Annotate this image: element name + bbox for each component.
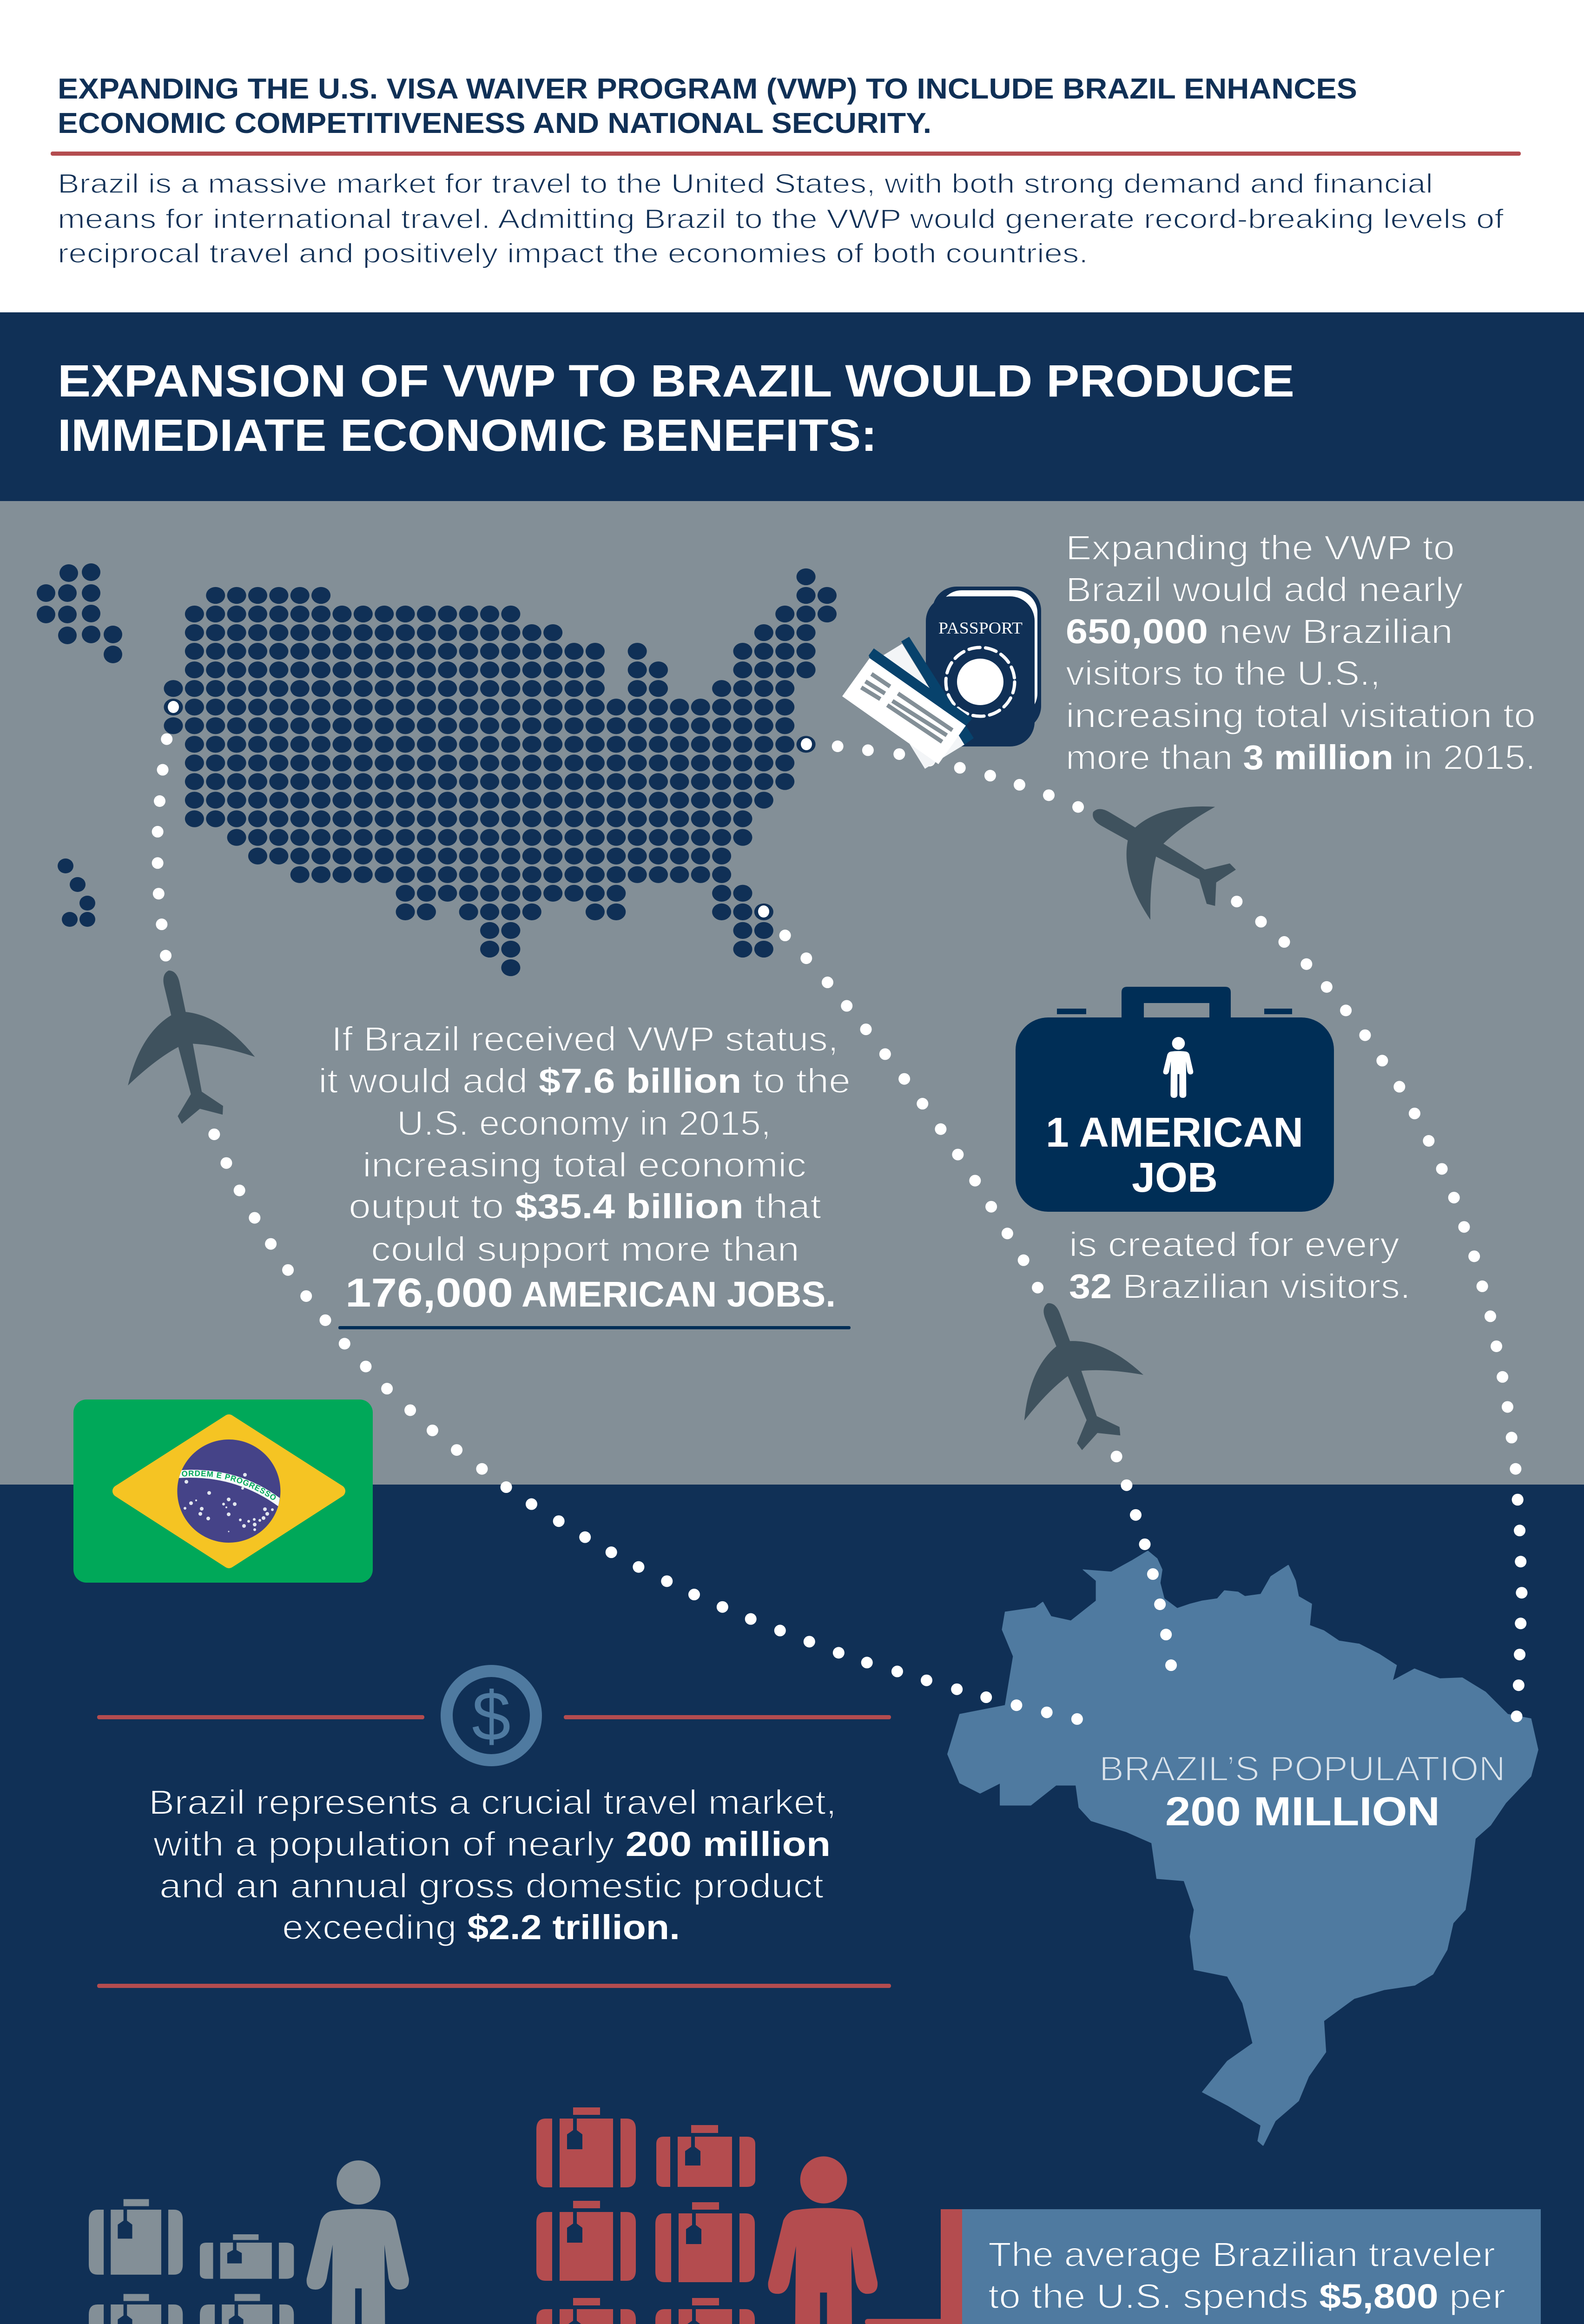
text: economic output: If Brazil received VWP status, [331,1020,838,1058]
text: created for every 32 visitors [1069,1225,1411,1306]
text: 650,000 new visitors: Expanding the VWP to [1066,528,1455,567]
icon: passport and tickets [842,587,1041,769]
map: departure points [168,701,812,918]
intro paragraph: means for international travel. Admitting Brazil to the VWP would generate record-breaking levels of [58,204,1504,234]
red rule below market text [97,1984,891,1988]
intro heading: ECONOMIC COMPETITIVENESS AND NATIONAL SECURITY. [58,107,931,139]
flag of Brazil [73,1400,373,1583]
section banner: economic benefits: EXPANSION OF VWP TO BRAZIL WOULD PRODUCE [58,356,1294,406]
text: 650,000 new visitors [1066,528,1536,777]
text: economic output: it would add $7.6 billion to the [318,1062,851,1100]
icon: briefcase: JOB [1132,1155,1218,1201]
callout: average spend: to the U.S. spends $5,800 per [988,2277,1505,2316]
icon: airplane east [1061,756,1258,944]
text: crucial travel market: Brazil represents a crucial travel market, [149,1783,837,1822]
flag of Brazil: ORDEM E PROGRESSO [181,1469,278,1503]
text: crucial travel market [149,1783,837,1947]
icon: briefcase: 1 AMERICAN [1046,1109,1303,1156]
text: 650,000 new visitors: increasing total visitation to [1066,696,1536,735]
text: 650,000 new visitors: 650,000 new Brazilian [1066,612,1453,651]
text: economic output: output to $35.4 billion that [349,1187,821,1226]
icon: passport and tickets: PASSPORT [938,619,1023,637]
intro heading: EXPANDING THE U.S. VISA WAIVER PROGRAM (VWP) TO INCLUDE BRAZIL ENHANCES [58,73,1357,105]
text: economic output: could support more than [371,1230,799,1268]
text: Brazil population: BRAZIL’S POPULATION [1099,1749,1505,1788]
text: economic output: U.S. economy in 2015, [397,1104,771,1142]
background: white intro [0,0,1584,312]
text: Brazil population [1099,1749,1505,1834]
map of Brazil [948,1551,1538,2146]
icon: dollar coin [447,1671,536,1760]
dotted flight paths: lower part [559,1500,1522,1719]
callout: average spend [865,2209,1541,2324]
icon: dollar coin: $ [472,1677,511,1755]
section banner: economic benefits: IMMEDIATE ECONOMIC BENEFITS: [58,410,877,461]
text: 650,000 new visitors: visitors to the U.S., [1066,654,1380,693]
text: crucial travel market: exceeding $2.2 trillion. [282,1908,680,1947]
text: 650,000 new visitors: more than 3 million in 2015. [1066,738,1536,777]
icon: airplane center [988,1281,1161,1466]
icon: Brazilian traveler luggage and person [536,2107,878,2324]
text: 650,000 new visitors: Brazil would add nearly [1066,570,1463,609]
map: Hawaii dots [58,858,95,927]
intro paragraph [58,169,1504,269]
text: created for every 32 visitors: 32 Brazilian visitors. [1069,1267,1411,1306]
intro paragraph: Brazil is a massive market for travel to the United States, with both strong demand and financial [58,169,1433,199]
icon: airplane west [105,956,266,1134]
underline: American jobs [338,1326,851,1329]
panel: navy Brazil and spending area [0,1485,1584,2324]
dotted flight paths: upper part [158,739,1518,1504]
text: economic output: AMERICAN JOBS. [521,1274,836,1314]
section banner: economic benefits [0,312,1584,501]
panel: gray map area [0,501,1584,1485]
text: economic output: increasing total economic [363,1146,806,1184]
text: created for every 32 visitors: is created for every [1069,1225,1399,1264]
intro paragraph: reciprocal travel and positively impact the economies of both countries. [58,238,1088,269]
text: economic output [318,1020,851,1315]
map: Alaska dots [37,563,122,663]
text: crucial travel market: with a population of nearly 200 million [153,1825,831,1863]
map: dotted United States [37,563,827,968]
callout: average spend: The average Brazilian traveler [988,2235,1495,2274]
text: crucial travel market: and an annual gross domestic product [159,1867,824,1905]
text: Brazil population: 200 MILLION [1165,1789,1440,1834]
intro heading [58,73,1357,139]
text: economic output: 176,000 [345,1270,513,1315]
red rules around dollar icon [97,1715,891,1719]
icon: briefcase [1016,987,1334,1212]
intro red rule [51,152,1521,156]
icon: European traveler luggage and person [89,2160,409,2324]
